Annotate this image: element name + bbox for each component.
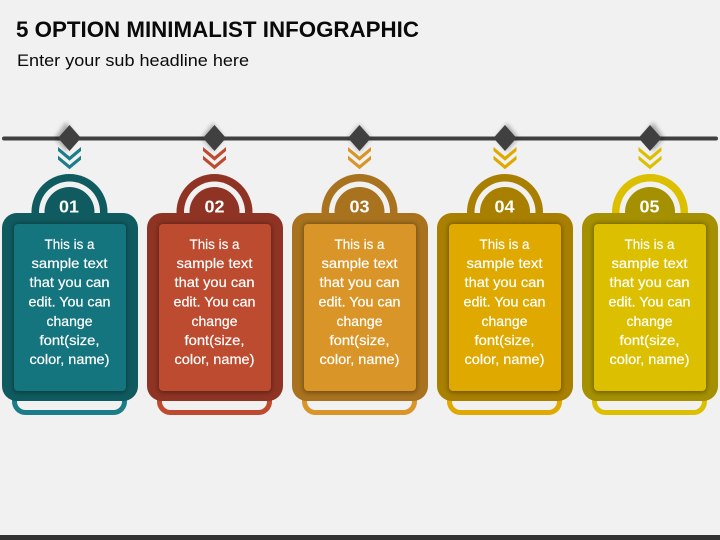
- option 04: [437, 123, 573, 413]
- chevrons 02: [203, 147, 226, 169]
- number badge 05: [612, 174, 688, 250]
- card text 02: font(size,: [184, 333, 244, 348]
- bottom tray 05: [594, 395, 705, 413]
- bottom bar: [0, 535, 720, 540]
- option 03: [292, 124, 428, 413]
- card text 03: that you can: [320, 275, 400, 290]
- number badge 01: 01: [59, 197, 79, 217]
- card text 02: This is a: [190, 237, 240, 252]
- title: 5 OPTION MINIMALIST INFOGRAPHIC: [16, 17, 419, 42]
- diamond marker 03: [348, 124, 371, 152]
- card text 04: [464, 237, 546, 367]
- card text 03: edit. You can: [318, 294, 400, 310]
- card 04: [437, 213, 573, 401]
- card text 04: change: [482, 314, 528, 329]
- card text 05: change: [626, 314, 672, 329]
- card 02: [147, 213, 283, 401]
- number badge 05: 05: [640, 197, 660, 217]
- diamond marker 02: [202, 123, 226, 151]
- diamond marker 04: [494, 123, 518, 151]
- diamond marker 05: [638, 122, 664, 151]
- number badge 02: [176, 174, 252, 250]
- card text 01: color, name): [30, 352, 110, 367]
- card text 05: This is a: [624, 237, 675, 252]
- card text 03: This is a: [334, 237, 385, 252]
- card text 05: color, name): [610, 352, 690, 367]
- card text 02: [174, 237, 256, 367]
- card text 02: sample text: [176, 256, 253, 271]
- number badge 01: [32, 174, 108, 250]
- timeline: [4, 138, 716, 140]
- card text 01: change: [46, 314, 92, 329]
- card 05: [582, 213, 718, 401]
- card text 04: font(size,: [474, 333, 534, 348]
- number badge 04: [467, 174, 543, 250]
- card text 01: This is a: [44, 237, 95, 252]
- card text 03: font(size,: [330, 333, 390, 348]
- card text 05: font(size,: [620, 333, 680, 348]
- card text 03: [318, 237, 400, 367]
- number badge 04: 04: [494, 197, 515, 217]
- chevrons 01: [58, 147, 81, 169]
- card text 04: sample text: [466, 256, 543, 271]
- bottom tray 04: [449, 395, 560, 413]
- card text 03: change: [336, 314, 382, 329]
- card text 04: that you can: [464, 275, 544, 290]
- card text 03: sample text: [322, 256, 398, 271]
- chevrons 03: [348, 147, 371, 169]
- chevrons 05: [638, 147, 662, 169]
- card text 01: font(size,: [40, 333, 100, 348]
- card 03: [292, 213, 428, 401]
- diamond marker 01: [55, 122, 81, 151]
- card text 05: sample text: [612, 256, 688, 271]
- card text 03: color, name): [320, 352, 400, 367]
- number badge 02: 02: [204, 197, 225, 217]
- card text 02: that you can: [174, 275, 254, 290]
- card text 01: [28, 237, 110, 367]
- card text 05: that you can: [610, 275, 690, 290]
- card text 01: edit. You can: [28, 294, 110, 310]
- number badge 03: [322, 174, 398, 250]
- card text 04: This is a: [480, 237, 530, 252]
- subtitle: Enter your sub headline here: [17, 51, 249, 70]
- card text 01: sample text: [32, 256, 108, 271]
- bottom tray 01: [14, 395, 125, 413]
- card text 02: change: [192, 314, 238, 329]
- chevrons 04: [494, 147, 516, 169]
- card text 02: color, name): [174, 352, 254, 367]
- card text 05: edit. You can: [608, 294, 690, 310]
- card text 04: edit. You can: [464, 294, 546, 310]
- card text 01: that you can: [30, 275, 109, 290]
- card text 02: edit. You can: [174, 294, 256, 310]
- option 02: [147, 123, 283, 413]
- option 01: [2, 122, 138, 413]
- bottom tray 02: [159, 395, 270, 413]
- card text 04: color, name): [464, 352, 544, 367]
- number badge 03: 03: [350, 197, 370, 217]
- bottom tray 03: [304, 395, 415, 413]
- option 05: [582, 122, 718, 413]
- card text 05: [608, 237, 690, 367]
- card 01: [2, 213, 138, 401]
